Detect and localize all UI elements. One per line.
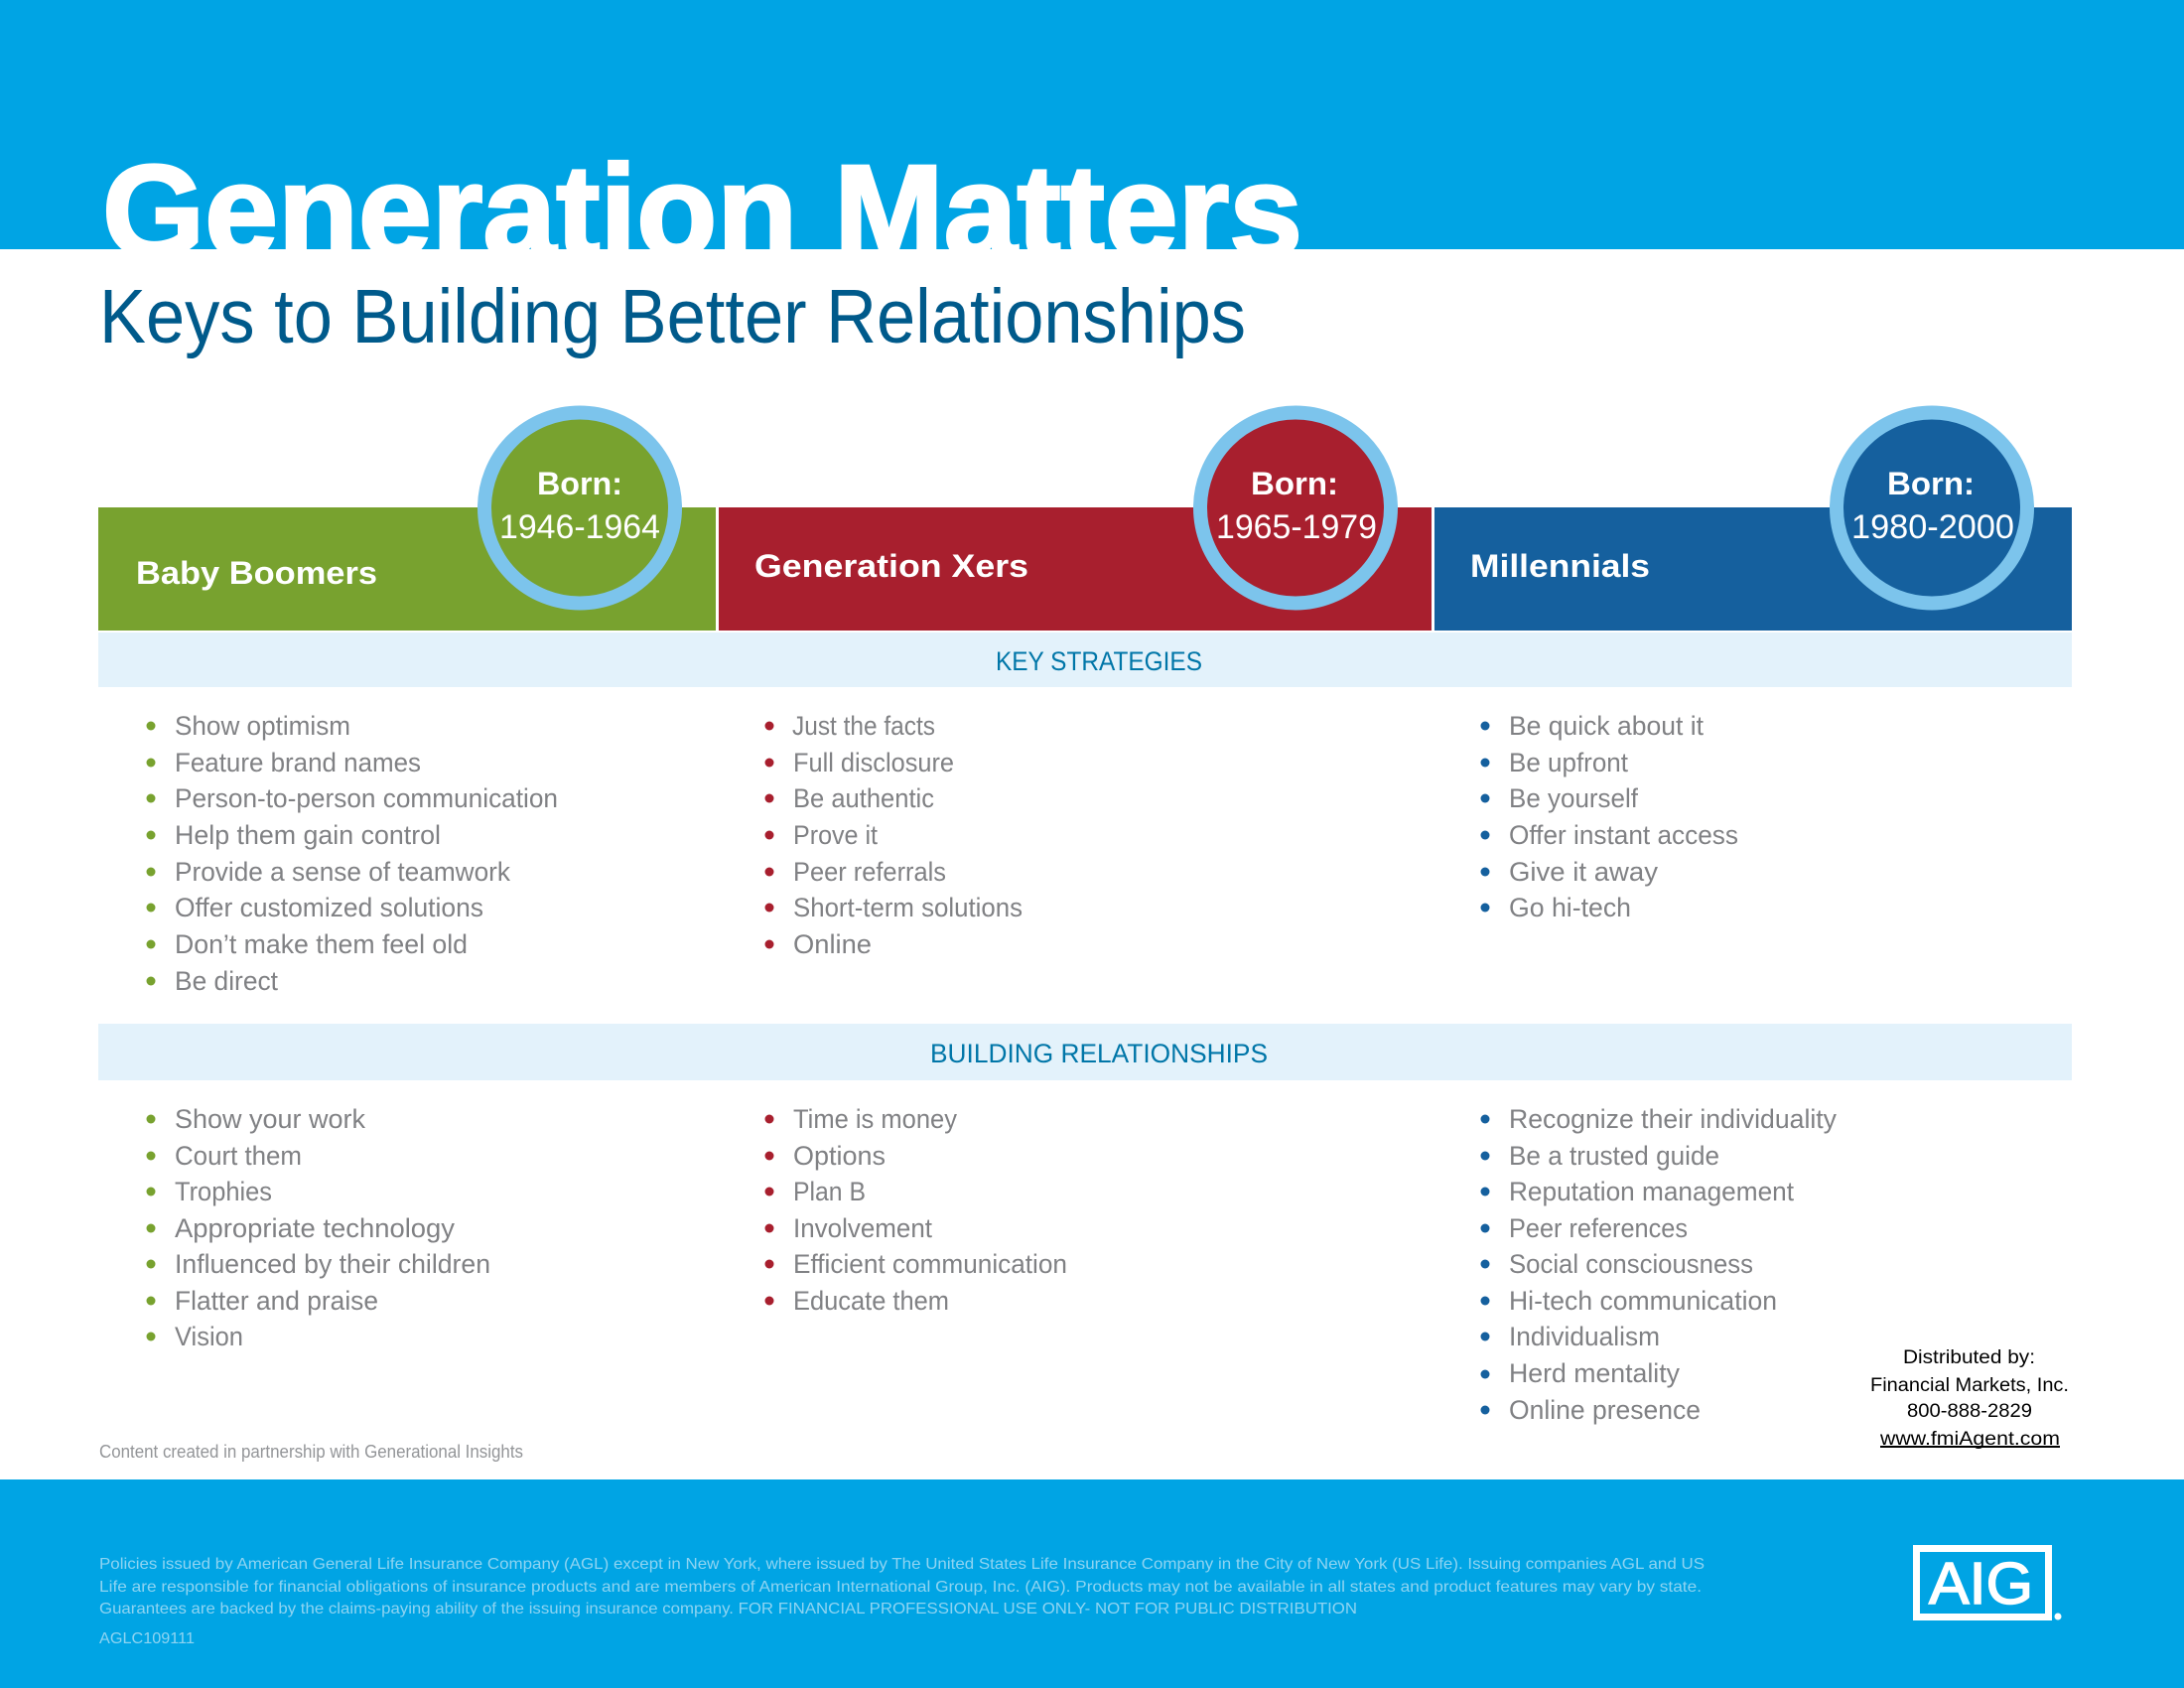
list: Baby Boomers building relationships: Influenced by their children — [175, 1249, 490, 1279]
legal text — [99, 1556, 1705, 1647]
list: Millennials key strategies: Be yourself — [1509, 783, 1638, 813]
distributor block: Distributed by: — [1903, 1347, 2035, 1368]
list: Baby Boomers building relationships — [147, 1104, 490, 1351]
list: Millennials building relationships: Reputation management — [1509, 1177, 1794, 1206]
heading: building relationships: BUILDING RELATIONSHIPS — [930, 1039, 1268, 1068]
legal text: Guarantees are backed by the claims-paying ability of the issuing insurance company. FOR FINANCIAL PROFESSIONAL USE ONLY- NOT FOR PUBLIC DISTRIBUTION — [99, 1601, 1357, 1618]
panel: Baby Boomers header: Baby Boomers — [136, 555, 377, 591]
list: Baby Boomers building relationships: Court them — [175, 1141, 302, 1171]
list: Millennials building relationships: Hi-tech communication — [1509, 1286, 1777, 1316]
distributor block: Financial Markets, Inc. — [1870, 1375, 2069, 1396]
list: Baby Boomers key strategies: Person-to-person communication — [175, 783, 558, 813]
list: Millennials building relationships: Recognize their individuality — [1509, 1104, 1837, 1134]
list: Baby Boomers key strategies: Be direct — [175, 966, 278, 996]
distributor block: 800-888-2829 — [1907, 1401, 2032, 1422]
list: Generation Xers key strategies: Peer referrals — [793, 857, 946, 887]
footer band — [0, 1479, 2184, 1688]
list: Baby Boomers key strategies: Show optimism — [175, 711, 350, 741]
list: Generation Xers building relationships — [764, 1104, 1067, 1316]
list: Generation Xers building relationships: Efficient communication — [793, 1249, 1067, 1279]
panel: Millennials header: Millennials — [1470, 548, 1650, 584]
list: Baby Boomers building relationships: Show your work — [175, 1104, 365, 1134]
panel: Millennials header — [1434, 413, 2072, 631]
AIG logo — [1916, 1549, 2061, 1620]
list: Millennials building relationships: Be a trusted guide — [1509, 1141, 1719, 1171]
panel: Millennials header: Born: — [1887, 466, 1975, 501]
list: Baby Boomers building relationships: Trophies — [175, 1177, 272, 1206]
header band — [0, 0, 2184, 249]
list: Millennials building relationships: Peer references — [1509, 1213, 1688, 1243]
distributor block — [1870, 1347, 2069, 1450]
list: Baby Boomers key strategies: Feature brand names — [175, 748, 421, 777]
list: Baby Boomers key strategies: Offer customized solutions — [175, 893, 483, 922]
list: Millennials key strategies: Be upfront — [1509, 748, 1628, 777]
list: Baby Boomers key strategies: Provide a sense of teamwork — [175, 857, 510, 887]
panel: Generation Xers header: 1965-1979 — [1216, 508, 1377, 546]
heading: key strategies — [98, 633, 2072, 687]
panel: Millennials header: 1980-2000 — [1851, 508, 2014, 546]
list: Millennials key strategies — [1481, 711, 1738, 922]
legal text: AGLC109111 — [99, 1630, 195, 1647]
list: Generation Xers building relationships: Plan B — [793, 1177, 866, 1206]
subtitle: Keys to Building Better Relationships — [99, 274, 1246, 359]
list: Generation Xers building relationships: Educate them — [793, 1286, 949, 1316]
list: Millennials key strategies: Go hi-tech — [1509, 893, 1631, 922]
list: Baby Boomers building relationships: Appropriate technology — [175, 1213, 456, 1243]
list: Millennials building relationships: Herd mentality — [1509, 1358, 1680, 1388]
list: Generation Xers key strategies — [764, 711, 1023, 959]
distributor block: www.fmiAgent.com — [1879, 1429, 2060, 1450]
panel: Baby Boomers header: Born: — [537, 466, 622, 501]
list: Generation Xers key strategies: Full disclosure — [793, 748, 954, 777]
list: Millennials building relationships — [1481, 1104, 1837, 1425]
list: Baby Boomers building relationships: Vision — [175, 1322, 243, 1351]
panel: Generation Xers header: Born: — [1251, 466, 1338, 501]
list: Generation Xers key strategies: Prove it — [793, 820, 878, 850]
list: Generation Xers key strategies: Just the facts — [792, 711, 935, 741]
panel: Generation Xers header — [719, 413, 1432, 631]
legal text: Life are responsible for financial obligations of insurance products and are members of American International Group, Inc. (AIG). Products may not be available in all states and product features may vary by state. — [99, 1579, 1702, 1596]
list: Millennials key strategies: Be quick about it — [1509, 711, 1704, 741]
list: Millennials building relationships: Online presence — [1509, 1395, 1701, 1425]
panel: Generation Xers header: Generation Xers — [754, 548, 1028, 584]
heading: key strategies: KEY STRATEGIES — [996, 646, 1202, 676]
title: Generation Matters — [102, 138, 1302, 284]
list: Generation Xers key strategies: Online — [793, 929, 872, 959]
list: Baby Boomers key strategies: Help them gain control — [175, 820, 441, 850]
list: Generation Xers key strategies: Short-term solutions — [793, 893, 1023, 922]
list: Generation Xers building relationships: Options — [793, 1141, 886, 1171]
panel: Baby Boomers header — [98, 413, 716, 631]
heading: building relationships — [98, 1024, 2072, 1080]
list: Millennials building relationships: Social consciousness — [1509, 1249, 1753, 1279]
credit line: Content created in partnership with Generational Insights — [99, 1442, 523, 1462]
list: Millennials key strategies: Give it away — [1509, 857, 1658, 887]
legal text: Policies issued by American General Life Insurance Company (AGL) except in New York, where issued by The United States Life Insurance Company in the City of New York (US Life). Issuing companies AGL and US — [99, 1556, 1705, 1573]
panel: Baby Boomers header: 1946-1964 — [499, 508, 660, 546]
list: Generation Xers building relationships: Time is money — [793, 1104, 957, 1134]
list: Millennials key strategies: Offer instant access — [1509, 820, 1738, 850]
list: Generation Xers key strategies: Be authentic — [793, 783, 934, 813]
list: Baby Boomers key strategies — [147, 711, 558, 996]
list: Generation Xers building relationships: Involvement — [793, 1213, 932, 1243]
list: Baby Boomers key strategies: Don’t make them feel old — [175, 929, 468, 959]
list: Baby Boomers building relationships: Flatter and praise — [175, 1286, 378, 1316]
AIG logo: AIG — [1929, 1551, 2033, 1617]
list: Millennials building relationships: Individualism — [1509, 1322, 1660, 1351]
